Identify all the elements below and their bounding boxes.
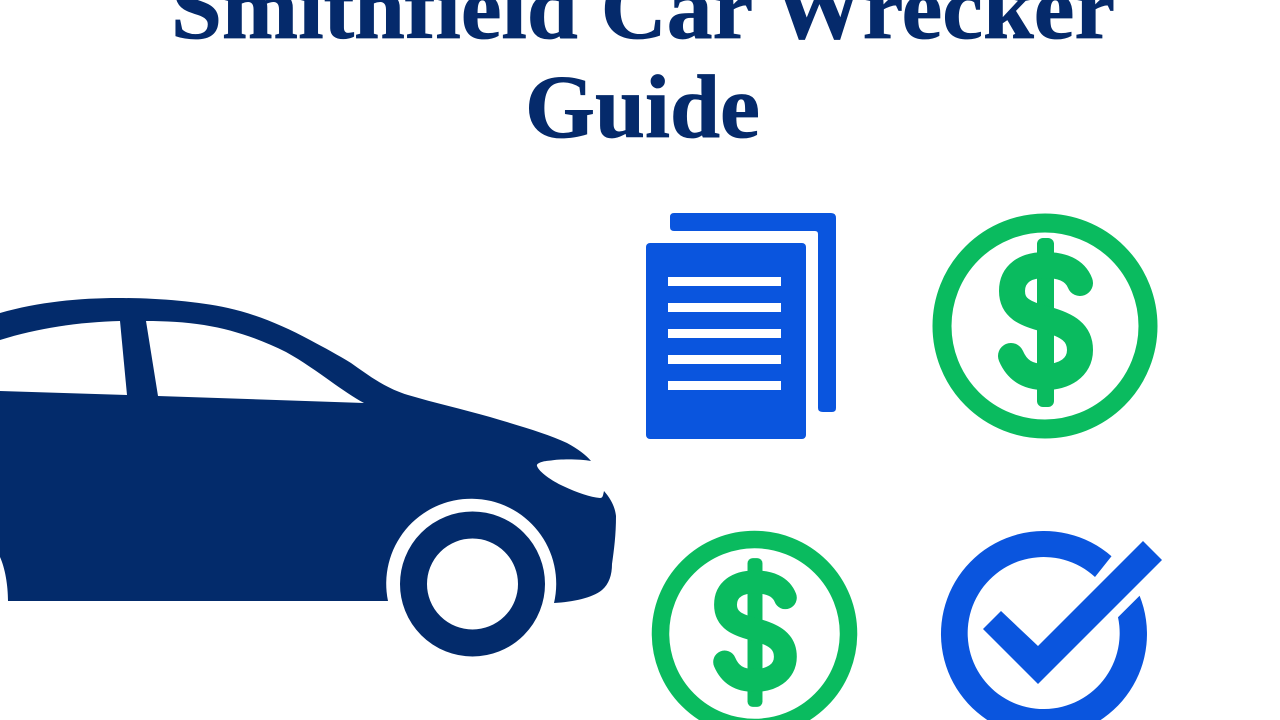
front window <box>146 321 364 403</box>
icon: car silhouette <box>0 298 616 643</box>
icon: documents <box>646 213 836 439</box>
title <box>171 0 1115 157</box>
front wheel <box>414 525 532 643</box>
rear window <box>0 321 127 395</box>
icon: dollar coin bottom <box>660 540 848 720</box>
icon: check mark circle <box>941 531 1162 720</box>
icon: dollar coin top <box>942 223 1148 429</box>
title: Guide <box>525 58 760 157</box>
